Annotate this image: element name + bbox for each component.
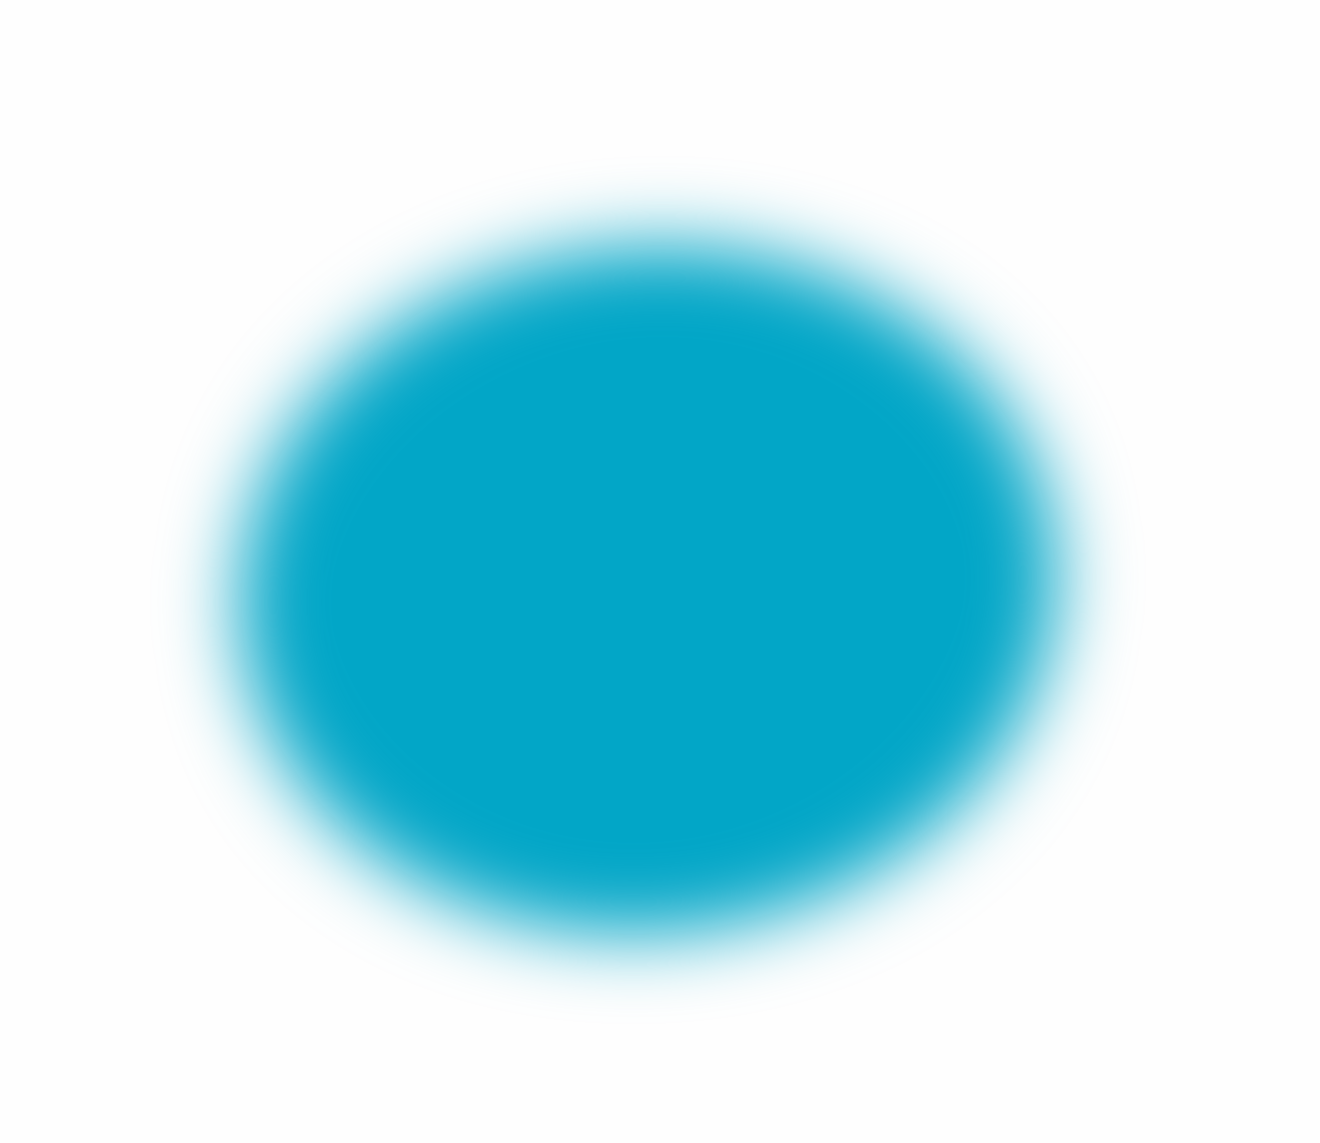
blurred teal ellipse (205, 205, 1091, 975)
